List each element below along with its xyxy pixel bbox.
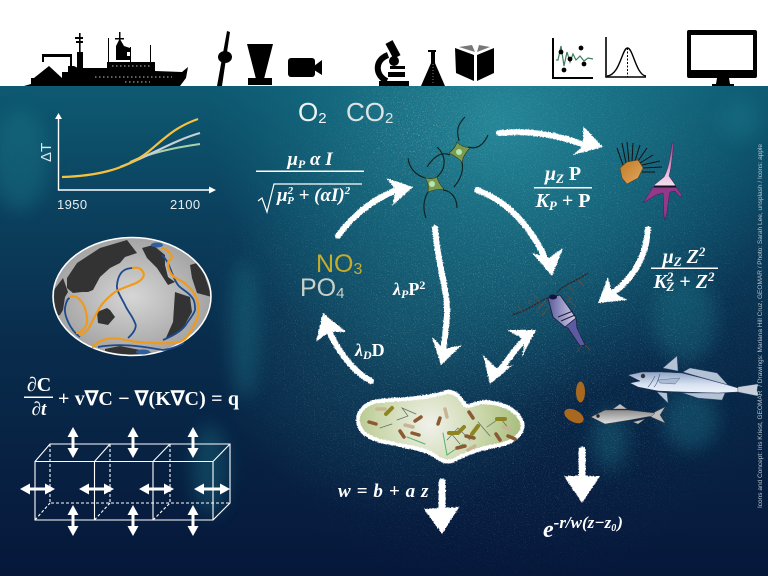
icon: research ship — [24, 32, 188, 86]
formula: tracer equation: ∂C — [27, 374, 51, 396]
arrow: sinking detritus — [424, 482, 459, 534]
formula: remineralisation: D — [362, 348, 372, 362]
icon: large fish — [628, 356, 758, 403]
grid exchange arrows — [27, 434, 224, 529]
formula: light limitation: P — [287, 195, 294, 207]
label: nitrate: 3 — [354, 261, 362, 278]
icon: small fish — [591, 404, 665, 424]
copepod — [512, 273, 590, 352]
icon: sediment trap — [247, 44, 273, 85]
faecal pellets — [562, 382, 586, 426]
formula: aggregation: 2 — [419, 278, 425, 292]
formula: tracer equation: ∂t — [32, 399, 47, 420]
credits: Icons and Concept: Iris Kriest, GEOMAR / Drawings: Mariana Hill Cruz, GEOMAR / Photo: Sarah Lee, unsplash / Icons: apple — [757, 144, 764, 508]
label: carbon dioxide: CO — [346, 97, 385, 127]
model grid boxes — [20, 427, 230, 536]
blue currents — [65, 255, 195, 350]
formula: grazing: K — [536, 190, 549, 212]
formula: predation: 2 — [707, 269, 715, 284]
formula: predation — [651, 244, 718, 294]
formula: predation: Z — [665, 279, 674, 294]
formula: remineralisation: λ — [355, 340, 363, 360]
formula: aggregation: λ — [393, 279, 401, 299]
formula: predation: Z — [673, 254, 682, 269]
formula: light limitation: + (αI) — [294, 185, 345, 206]
label: nitrate: NO — [316, 250, 354, 278]
icon: video camera — [288, 58, 322, 77]
globe with ocean circulation — [50, 238, 212, 358]
formula: aggregation: P — [401, 287, 409, 301]
formula: predation: Z — [682, 246, 699, 268]
label: phosphate: PO — [300, 274, 336, 302]
arrow: zooplankton grazing — [598, 229, 648, 303]
icon: microscope — [378, 42, 409, 86]
formula: remineralisation depth: e — [543, 517, 554, 543]
formula: light limitation: 2 — [287, 185, 294, 197]
icon: dinoflagellate — [643, 143, 682, 220]
formula: predation: μ — [663, 246, 674, 268]
diatom chain — [408, 117, 488, 218]
formula: predation: Z — [695, 271, 708, 293]
land masses — [50, 240, 212, 358]
year start: 1950 — [57, 197, 88, 212]
formula: grazing: P — [564, 163, 581, 185]
formula: light limitation: μ — [287, 149, 298, 170]
icon: flask — [421, 50, 445, 86]
arrow: detritus exchange — [483, 330, 536, 384]
formula: light limitation: 2 — [344, 185, 351, 197]
formula: predation: K — [654, 271, 667, 293]
arrow: pellet sinking — [564, 450, 600, 503]
formula: grazing: + P — [557, 190, 590, 212]
orange currents — [70, 248, 198, 347]
label: phosphate: 4 — [336, 285, 344, 302]
formula: remineralisation depth: 0 — [611, 523, 616, 534]
formula: aggregation: P — [408, 279, 419, 299]
formula: predation: + — [674, 271, 696, 293]
formula: tracer equation — [24, 374, 239, 420]
aggregate: marine snow — [358, 392, 522, 462]
formula: light limitation: μ — [277, 185, 288, 206]
arrow: phytoplankton to zooplankton — [477, 190, 563, 276]
label: oxygen: O — [298, 97, 318, 127]
label: carbon dioxide: 2 — [385, 110, 393, 127]
formula: grazing: Z — [555, 171, 564, 186]
formula: sinking speed: w = b + a z — [338, 481, 429, 502]
formula: predation: 2 — [698, 244, 706, 259]
white header band — [0, 0, 768, 86]
icon: CTD rosette — [217, 31, 232, 86]
formula: tracer equation: + v∇C − ∇(K∇C) = q — [58, 388, 239, 410]
icon: computer monitor — [687, 30, 757, 86]
formula: remineralisation: D — [372, 340, 385, 360]
icon: scatter plot with wave — [553, 38, 593, 78]
label: oxygen: 2 — [318, 110, 327, 127]
chart: temperature projections — [38, 113, 216, 212]
arrow: remineralisation — [316, 313, 371, 381]
formula: predation: 2 — [666, 269, 674, 284]
arrow: phytoplankton to grazers — [499, 126, 603, 155]
arrow: phytoplankton aggregation — [432, 228, 462, 365]
formula: remineralisation depth: ) — [615, 513, 623, 532]
icon: open book — [455, 45, 494, 81]
icon: gaussian curve — [606, 37, 646, 77]
year end: 2100 — [170, 197, 201, 212]
formula: light limitation: P — [298, 157, 306, 171]
formula: light limitation: α I — [305, 149, 333, 170]
formula: grazing: μ — [545, 163, 556, 185]
icon: ciliate zooplankton — [617, 142, 662, 184]
formula: remineralisation depth: -r/w(z−z — [554, 513, 623, 534]
formula: grazing — [534, 163, 592, 213]
arrow: nutrients to phytoplankton — [338, 178, 413, 236]
formula: grazing: P — [549, 198, 558, 213]
formula: light limitation — [256, 149, 364, 212]
axis label: ΔT — [38, 143, 55, 162]
